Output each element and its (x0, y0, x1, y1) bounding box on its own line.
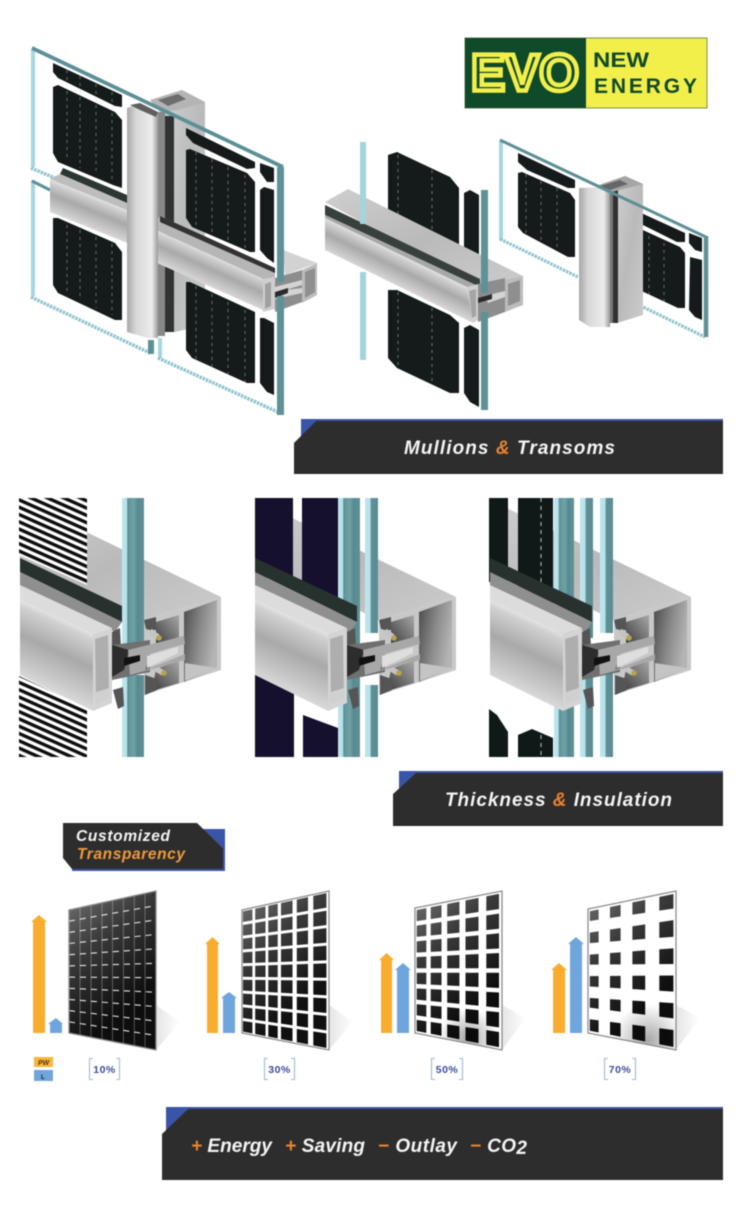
glass top and right edges (500, 140, 708, 337)
logo: EVO New Energy: EVO (471, 44, 579, 102)
front mullion (127, 103, 158, 338)
logo: EVO New Energy: NEW (593, 49, 649, 72)
label: 70% (604, 1058, 636, 1080)
banner: Mullions & Transoms (294, 419, 723, 474)
legend: PW (38, 1060, 51, 1067)
banner: Energy Saving Outlay CO2: 2 (515, 1138, 527, 1159)
glass (122, 498, 144, 757)
panel: double glazing section (255, 498, 456, 757)
arrow: light (395, 963, 411, 1033)
navy solar cells (255, 498, 338, 757)
label: 50% (432, 1058, 462, 1080)
banner: Energy Saving Outlay CO2: − Outlay (378, 1136, 458, 1157)
banner: Thickness & Insulation: Thickness & Insulation (445, 790, 672, 811)
solar cells right (186, 128, 274, 395)
back glass pane (360, 272, 366, 360)
chart: 50% transparency (378, 890, 518, 1052)
transom left arm (50, 168, 127, 243)
banner: Thickness & Insulation (393, 771, 723, 826)
arrow: power (205, 937, 220, 1033)
solar module 30% (242, 885, 329, 1055)
chart: 10% transparency (31, 885, 180, 1055)
solar cells (518, 153, 702, 320)
glass outlines left (31, 49, 280, 413)
logo: EVO New Energy: ENERGY (594, 75, 697, 98)
glass top edge and right edge (32, 48, 283, 415)
label: 10% (90, 1058, 120, 1080)
panel: triple glazing section (489, 498, 691, 757)
cell busbars (398, 155, 432, 385)
arrow: power (31, 915, 47, 1033)
front glass pane (481, 190, 488, 410)
cell busbars (67, 70, 245, 382)
legend: L (41, 1075, 45, 1081)
banner: Energy Saving Outlay CO2: − CO (470, 1136, 516, 1157)
transom right arm (150, 216, 317, 312)
panel shadow (676, 1005, 700, 1050)
banner: Energy Saving Outlay CO2: + Saving (285, 1136, 365, 1157)
glass left edges (500, 141, 705, 337)
diagram: mullion side assembly (500, 140, 708, 337)
glass (554, 498, 613, 757)
mullion (579, 176, 643, 327)
panel shadow (156, 1005, 180, 1050)
back mullion (150, 90, 205, 336)
banner: Customized Transparency: Customized (76, 828, 171, 845)
banner: Customized Transparency (63, 823, 225, 871)
chart: 30% transparency (205, 885, 353, 1055)
panel shadow (502, 1005, 526, 1050)
banner: Mullions & Transoms: Mullions & Transoms (404, 438, 615, 459)
panel: single glazing section (19, 498, 221, 757)
diagram: transom side assembly (325, 142, 523, 410)
panel shadow (329, 1005, 353, 1050)
label: 10%: 10% (93, 1064, 116, 1076)
arrow: light (221, 992, 237, 1033)
arrow: light (568, 937, 584, 1033)
label: 30%: 30% (268, 1064, 291, 1076)
logo: EVO New Energy (465, 38, 707, 108)
banner: Energy Saving Outlay CO2 (162, 1107, 723, 1180)
banner: Energy Saving Outlay CO2: + Energy (191, 1136, 273, 1157)
solar cells (388, 152, 479, 407)
arrow: power (379, 953, 394, 1033)
solar module 50% (416, 893, 500, 1048)
diagram: curtain wall cross assembly (31, 48, 317, 415)
striped solar cells (19, 498, 87, 757)
cell busbars (526, 174, 664, 302)
label: 50%: 50% (436, 1064, 458, 1076)
solar cells left (53, 63, 122, 320)
arrow: power (551, 963, 567, 1033)
label: 70%: 70% (609, 1064, 631, 1076)
glass (338, 498, 378, 757)
black solar cells (489, 498, 553, 757)
legend (34, 1057, 53, 1081)
arrow: light (48, 1018, 63, 1033)
transom body (325, 142, 523, 323)
banner: Customized Transparency: Transparency (77, 846, 186, 863)
solar module 10% (69, 885, 156, 1055)
solar module 70% (589, 893, 676, 1049)
label: 30% (264, 1058, 294, 1080)
chart: 70% transparency (550, 890, 692, 1052)
